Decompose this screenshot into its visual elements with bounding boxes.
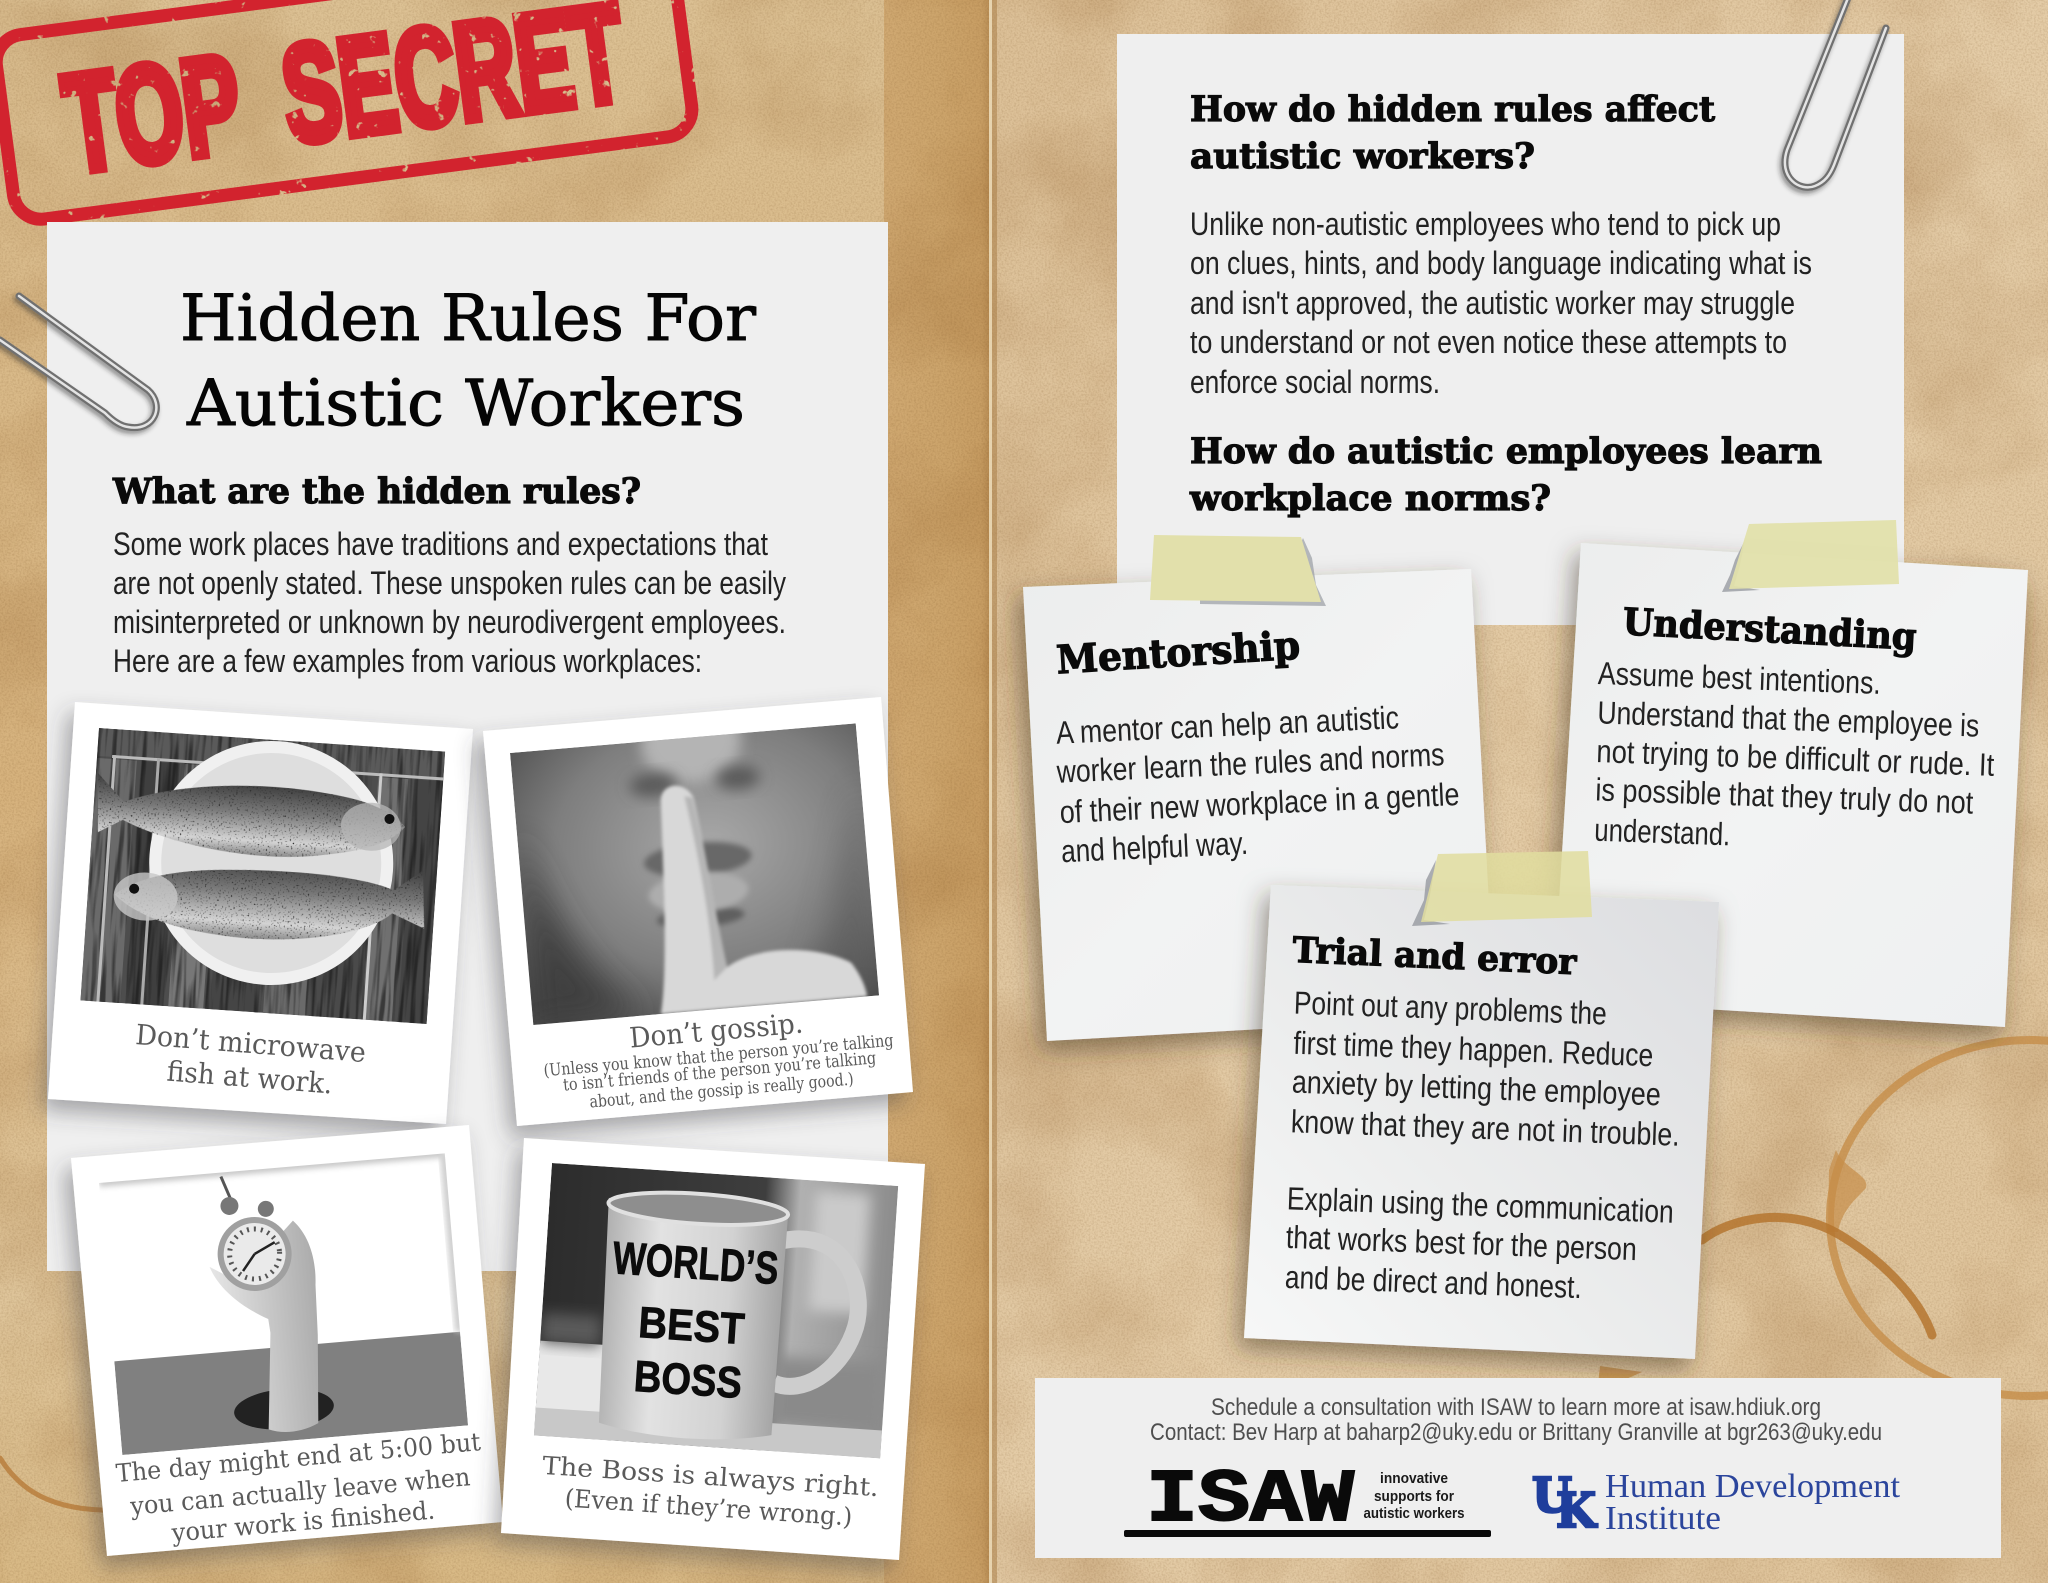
caption: day might end: The day might end at 5:00 but: [115, 1427, 482, 1488]
caption: microwave: [134, 1018, 367, 1100]
tape: [1412, 851, 1592, 926]
photo: arm holding clock: [98, 1145, 473, 1455]
text block: effects: enforce social norms.: [1190, 364, 1440, 400]
top secret stamp: TOP: [56, 26, 249, 202]
text block: intro: Some work places have traditions and expectations that: [113, 526, 768, 562]
caption: day might end: your work is finished.: [170, 1496, 436, 1548]
text block: effects: and isn't approved, the autistic worker may struggle: [1190, 285, 1795, 321]
logo: UK: [1532, 1468, 1598, 1539]
note: trial and error: [1244, 851, 1719, 1359]
text: trial and error body: that works best for the person: [1285, 1219, 1637, 1267]
panel: left paper: [0, 222, 888, 1271]
paperclip left: [0, 296, 156, 428]
caption: day might end: [115, 1427, 482, 1548]
heading: understanding: Understanding: [1622, 599, 1918, 659]
heading: how do hidden rules affect: autistic workers?: [1190, 136, 1535, 177]
text block: intro: [113, 526, 786, 679]
caption: gossip: about, and the gossip is really good.): [589, 1070, 854, 1113]
polaroid: boss mug: [501, 1138, 925, 1560]
text block: effects: [1190, 206, 1812, 400]
heading: how do hidden rules affect: How do hidden rules affect: [1190, 89, 1715, 130]
caption: microwave: Don’t microwave: [134, 1018, 367, 1069]
contact text: [1150, 1394, 1882, 1446]
tape: [1150, 535, 1326, 606]
heading: mentorship: Mentorship: [1055, 623, 1301, 683]
text: understanding body: Assume best intentions.: [1597, 655, 1881, 701]
text: trial and error body: know that they are not in trouble.: [1290, 1103, 1680, 1153]
logo: human development institute: [1605, 1468, 1901, 1537]
logo: ISAW: supports for: [1374, 1488, 1454, 1505]
heading: how do hidden rules affect: [1190, 89, 1715, 177]
text block: effects: Unlike non-autistic employees who tend to pick up: [1190, 206, 1781, 242]
caption: boss is always right: (Even if they’re wrong.): [564, 1484, 853, 1532]
text: trial and error body: anxiety by letting the employee: [1291, 1064, 1661, 1112]
title: [180, 282, 756, 441]
heading: how do autistic employees learn: [1189, 431, 1822, 519]
text block: intro: are not openly stated. These unspoken rules can be easily: [113, 565, 786, 601]
polaroid: gossip: [483, 688, 913, 1126]
note: mentorship: [1023, 535, 1495, 1041]
title: Hidden Rules For: [180, 282, 756, 356]
text: mentorship body: worker learn the rules and norms: [1055, 736, 1445, 790]
logo: human development institute: Institute: [1605, 1500, 1721, 1537]
text: understanding body: Understand that the employee is: [1597, 694, 1980, 744]
panel: right paper: [1117, 0, 1904, 625]
finger and hand: [658, 784, 869, 1014]
photo: fish on plate: [80, 728, 445, 1024]
clock: [218, 1176, 292, 1291]
tape: [1722, 520, 1899, 592]
contact text: Schedule a consultation with ISAW to learn more at isaw.hdiuk.org: [1211, 1394, 1821, 1421]
logo: UK: K: [1556, 1483, 1598, 1539]
caption: boss is always right: [541, 1451, 880, 1532]
title: Autistic Workers: [186, 367, 745, 441]
paperclip top: [1785, 0, 1886, 187]
heading: how do autistic employees learn: workplace norms?: [1189, 478, 1551, 519]
heading: trial and error: Trial and error: [1292, 930, 1578, 983]
text block: effects: to understand or not even notice these attempts to: [1190, 324, 1787, 360]
note: understanding: [1553, 520, 2028, 1027]
heading: how do autistic employees learn: How do autistic employees learn: [1190, 431, 1822, 472]
mug text: BEST: [637, 1298, 746, 1354]
panel: footer: [1035, 1378, 2001, 1558]
mug text: BOSS: [632, 1352, 743, 1408]
text block: intro: Here are a few examples from various workplaces:: [113, 643, 702, 679]
heading: what are the hidden rules: What are the hidden rules?: [112, 471, 641, 512]
text block: intro: misinterpreted or unknown by neurodivergent employees.: [113, 604, 786, 640]
text: understanding body: understand.: [1594, 812, 1731, 852]
mug text: [614, 1241, 778, 1398]
text: understanding body: is possible that they truly do not: [1595, 771, 1974, 821]
text: mentorship body: A mentor can help an autistic: [1055, 699, 1400, 751]
caption: gossip: [543, 1007, 894, 1113]
polaroid: fish: [48, 702, 473, 1124]
top secret stamp: [0, 0, 695, 223]
text: trial and error body: first time they happen. Reduce: [1293, 1025, 1654, 1073]
caption: gossip: to isn’t friends of the person you’re talking: [562, 1048, 877, 1096]
text: mentorship body: and helpful way.: [1060, 825, 1249, 869]
caption: gossip: (Unless you know that the person you’re talking: [543, 1031, 894, 1081]
logo: ISAW: ISAW: [1146, 1459, 1355, 1543]
caption: day might end: you can actually leave when: [128, 1462, 471, 1521]
photo: world's best boss mug: [534, 1163, 898, 1458]
photo: finger to lips: [510, 724, 879, 1025]
contact text: Contact: Bev Harp at baharp2@uky.edu or Brittany Granville at bgr263@uky.edu: [1150, 1419, 1882, 1446]
text: mentorship body: [1055, 699, 1460, 869]
fish one: [98, 774, 405, 858]
fish two: [116, 870, 424, 940]
logo: UK: U: [1532, 1468, 1572, 1524]
text block: effects: on clues, hints, and body language indicating what is: [1190, 245, 1812, 281]
caption: boss is always right: The Boss is always right.: [541, 1451, 880, 1502]
text: trial and error body: Point out any problems the: [1293, 985, 1607, 1031]
polaroid: clock: [71, 1125, 503, 1556]
logo: ISAW: autistic workers: [1364, 1505, 1464, 1522]
text: trial and error body: Explain using the communication: [1286, 1180, 1674, 1230]
text: trial and error body: [1284, 985, 1680, 1305]
coffee stain rings: [0, 1040, 2048, 1510]
text: mentorship body: of their new workplace in a gentle: [1059, 776, 1460, 830]
caption: microwave: fish at work.: [166, 1055, 334, 1100]
logo: ISAW: [1124, 1459, 1491, 1543]
logo: ISAW: innovative: [1380, 1470, 1448, 1487]
text: trial and error body: and be direct and honest.: [1284, 1259, 1582, 1305]
text: understanding body: [1594, 655, 1995, 852]
mug text: WORLD’S: [611, 1231, 780, 1294]
caption: gossip: Don’t gossip.: [628, 1007, 804, 1055]
logo: human development institute: Human Development: [1605, 1468, 1901, 1505]
